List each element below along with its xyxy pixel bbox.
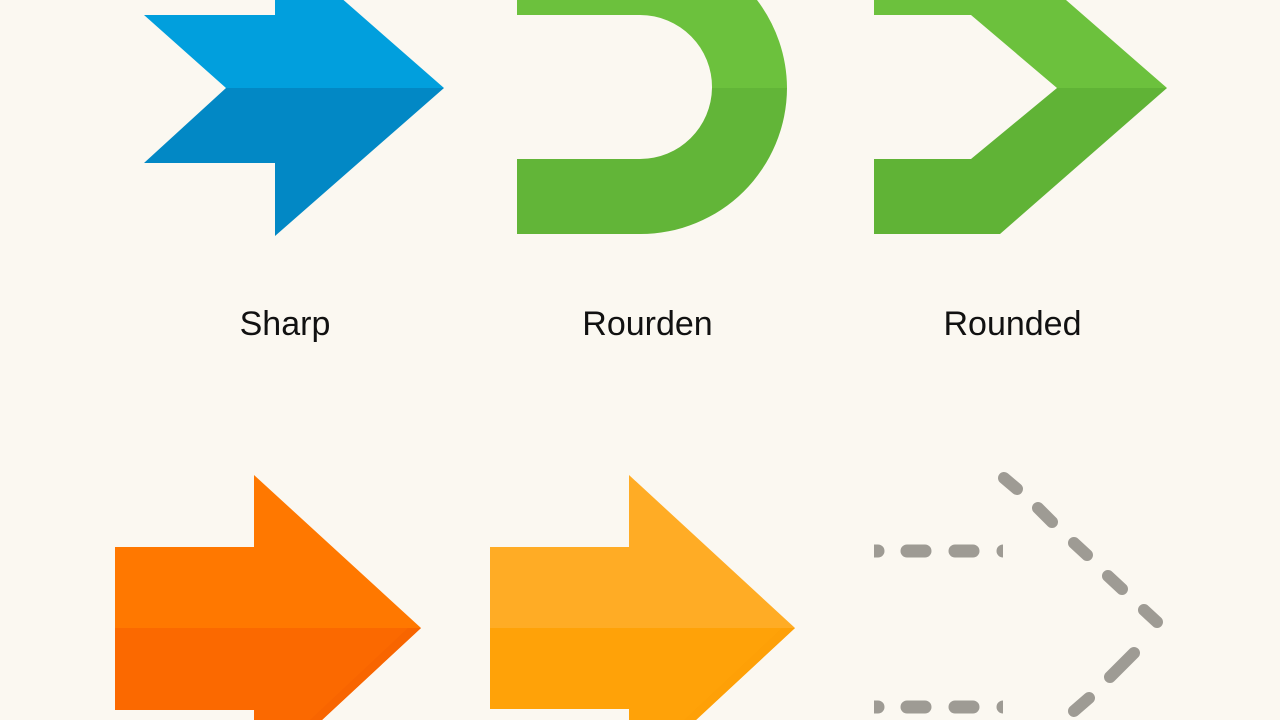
arrow: blue sharp notched (144, 0, 444, 236)
arrow: amber solid (490, 475, 795, 720)
label: Rourden: Rourden (582, 305, 713, 343)
arrow: green chevron (874, 0, 1167, 234)
arrow: grey dashed outline (874, 478, 1157, 714)
arrow: green rounded band (517, 0, 787, 234)
label: Sharp: Sharp (240, 305, 330, 343)
arrow: orange solid (115, 475, 421, 720)
label: Rounded: Rounded (943, 305, 1082, 343)
